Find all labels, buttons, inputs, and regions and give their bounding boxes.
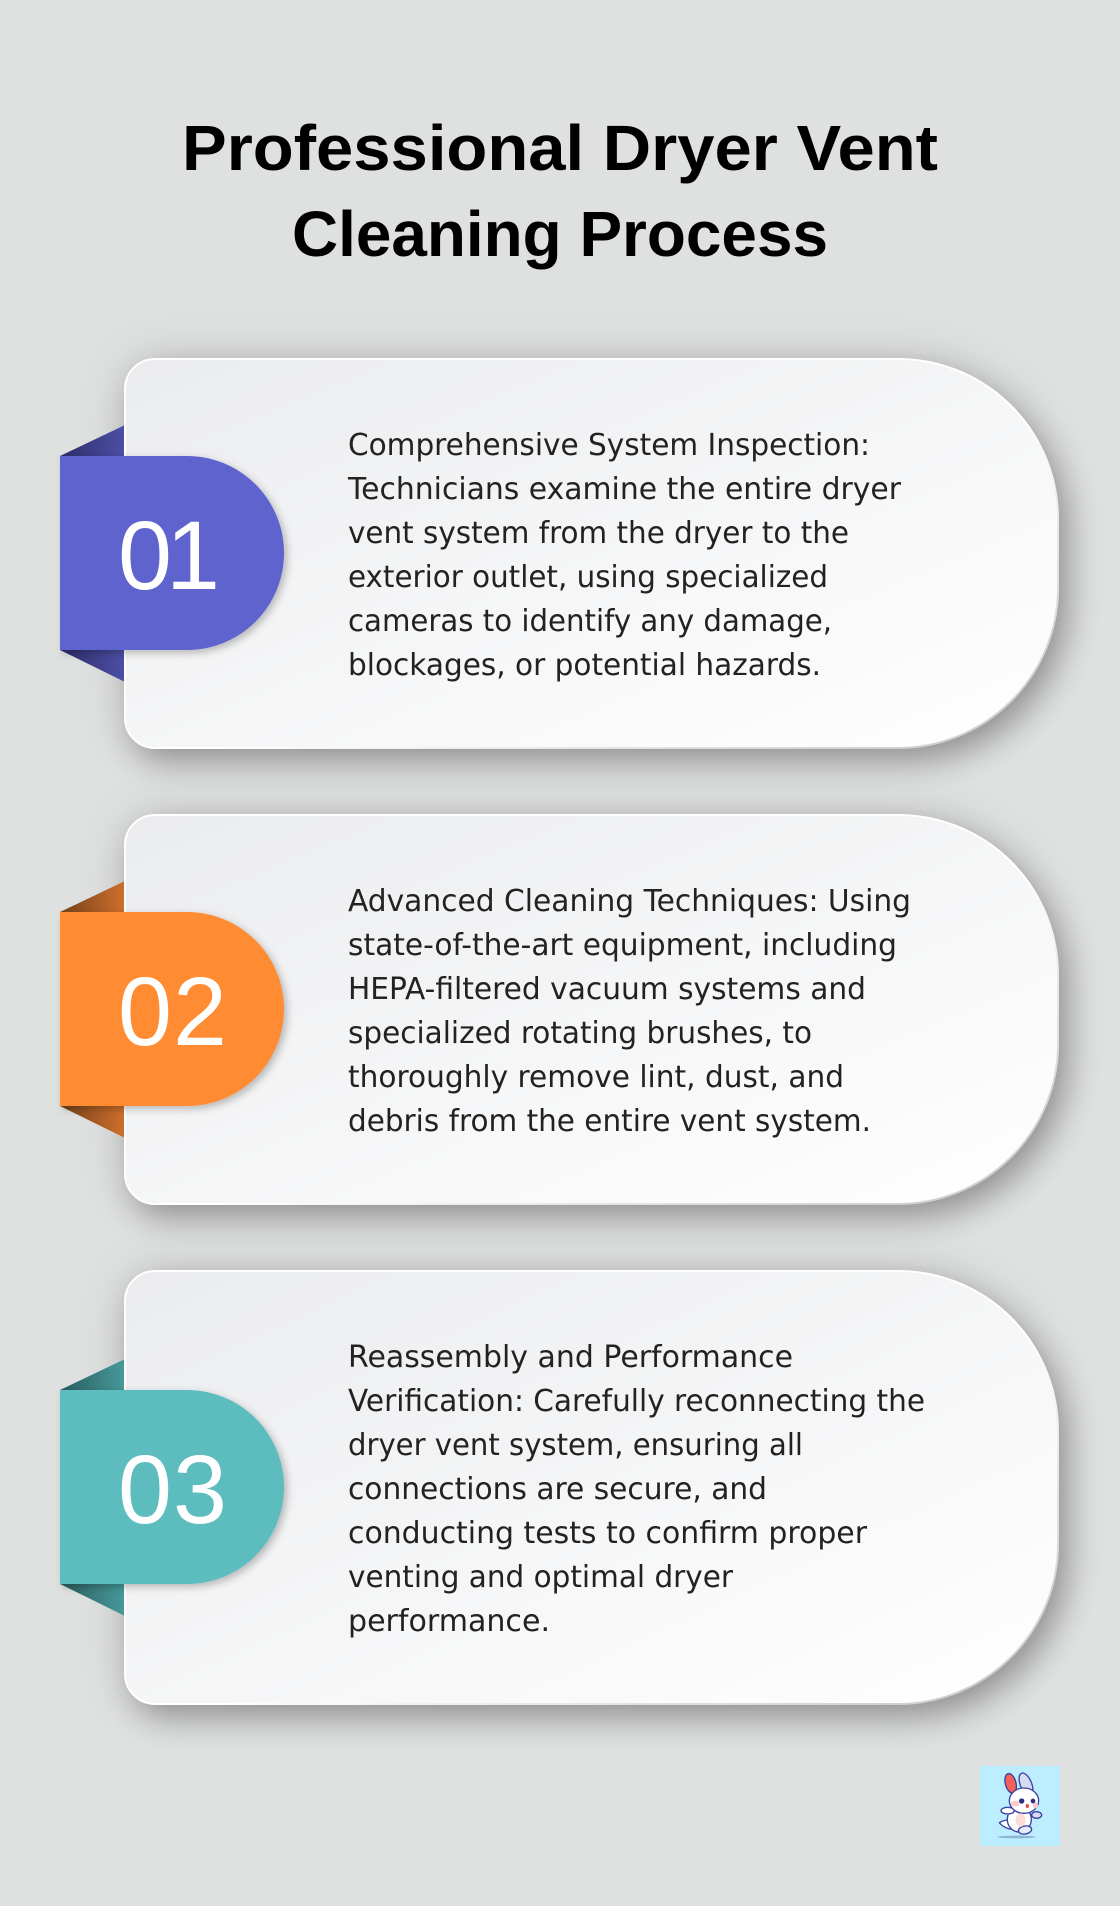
panel: step 03: [60, 1271, 1067, 1717]
number badge 03: [60, 1390, 284, 1584]
text: step 03: Verification: Carefully reconnecting the: [348, 1384, 925, 1419]
card 03: [125, 1271, 1058, 1704]
text: step 03: Reassembly and Performance: [348, 1340, 793, 1375]
text: step 02: thoroughly remove lint, dust, and: [348, 1060, 844, 1095]
text: step 01: Technicians examine the entire dryer: [347, 472, 902, 507]
text: step 01: exterior outlet, using specialized: [348, 560, 828, 595]
number badge 01: [60, 456, 284, 650]
text: step 03: connections are secure, and: [348, 1472, 767, 1507]
title: [182, 112, 938, 270]
panel: step 01: [60, 359, 1067, 761]
number 01: 01: [118, 501, 220, 610]
text: step 02: state-of-the-art equipment, including: [348, 928, 897, 963]
card 01: [125, 359, 1058, 748]
text: step 02: Advanced Cleaning Techniques: Using: [348, 884, 911, 919]
title: Cleaning Process: [292, 198, 828, 270]
text: step 01: cameras to identify any damage,: [348, 604, 832, 639]
text: step 02: specialized rotating brushes, to: [348, 1016, 812, 1051]
card 02: [125, 815, 1058, 1204]
ribbon fold 02: [60, 881, 125, 1138]
text: step 02: debris from the entire vent system.: [348, 1104, 871, 1139]
text: step 01: blockages, or potential hazards.: [348, 648, 821, 683]
text: step 03: dryer vent system, ensuring all: [348, 1428, 803, 1463]
text: step 03: conducting tests to confirm proper: [348, 1516, 868, 1551]
title: Professional Dryer Vent: [182, 112, 938, 184]
number 02: 02: [118, 957, 227, 1066]
number 03: 03: [118, 1435, 227, 1544]
icon: bunny logo: [980, 1766, 1060, 1846]
panel: step 02: [60, 815, 1067, 1217]
text: step 02: [348, 884, 911, 1139]
number badge 02: [60, 912, 284, 1106]
text: step 03: performance.: [348, 1604, 550, 1639]
ribbon fold 01: [60, 425, 125, 682]
text: step 03: [348, 1340, 925, 1639]
text: step 03: venting and optimal dryer: [348, 1560, 734, 1595]
text: step 01: vent system from the dryer to the: [348, 516, 849, 551]
ribbon fold 03: [60, 1359, 125, 1616]
text: step 02: HEPA-filtered vacuum systems and: [348, 972, 866, 1007]
text: step 01: [347, 428, 902, 683]
text: step 01: Comprehensive System Inspection:: [348, 428, 870, 463]
